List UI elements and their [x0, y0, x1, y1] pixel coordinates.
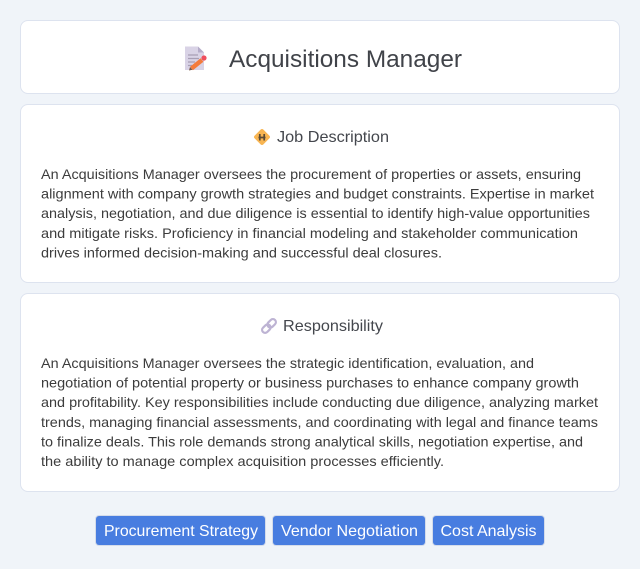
icon: orange diamond	[254, 129, 270, 145]
text block: responsibility body: trends, managing financial assessments, and coordinating with legal and finance teams	[41, 414, 598, 430]
tag: Procurement Strategy: Procurement Strategy	[104, 523, 258, 540]
text block: responsibility body: and profitability. Key responsibilities include conducting due diligence, analyzing market	[41, 394, 598, 410]
tag: Cost Analysis: Cost Analysis	[440, 523, 536, 540]
heading: Job Description: Job Description	[277, 129, 389, 146]
text block: job description body: and mitigate risks. Proficiency in financial modeling and stakeholder communication	[41, 225, 578, 241]
tag: Vendor Negotiation: Vendor Negotiation	[281, 523, 418, 540]
panel: title	[20, 20, 620, 94]
panel: job description	[20, 104, 620, 283]
tag: Cost Analysis	[433, 516, 544, 545]
panel: responsibility	[20, 293, 620, 492]
text block: responsibility body: negotiation of potential property or business purchases to enhance company growth	[41, 375, 579, 391]
icon: document with pencil	[185, 46, 207, 70]
text block: job description body: analysis, negotiation, and due diligence is essential to identify high-value opportunities	[41, 205, 590, 221]
text block: job description body: alignment with company growth strategies and budget constraints. Expertise in market	[41, 186, 594, 202]
text block: responsibility body: to finalize deals. This role demands strong analytical skills, negotiation expertise, and	[41, 433, 583, 449]
text block: job description body: An Acquisitions Manager oversees the procurement of properties or assets, ensuring	[41, 166, 581, 182]
text block: job description body	[41, 166, 594, 260]
tag: Procurement Strategy	[96, 516, 265, 545]
text block: responsibility body: An Acquisitions Manager oversees the strategic identification, evaluation, and	[41, 355, 534, 371]
heading: Responsibility: Responsibility	[283, 318, 383, 335]
text block: job description body: drives informed decision-making and successful deal closures.	[41, 244, 442, 260]
text block: responsibility body: the ability to manage complex acquisition processes efficiently.	[41, 453, 444, 469]
text block: responsibility body	[41, 355, 598, 469]
heading: Acquisitions Manager: Acquisitions Manager	[229, 46, 462, 73]
tag: Vendor Negotiation	[273, 516, 425, 545]
icon: chain link	[261, 318, 277, 334]
